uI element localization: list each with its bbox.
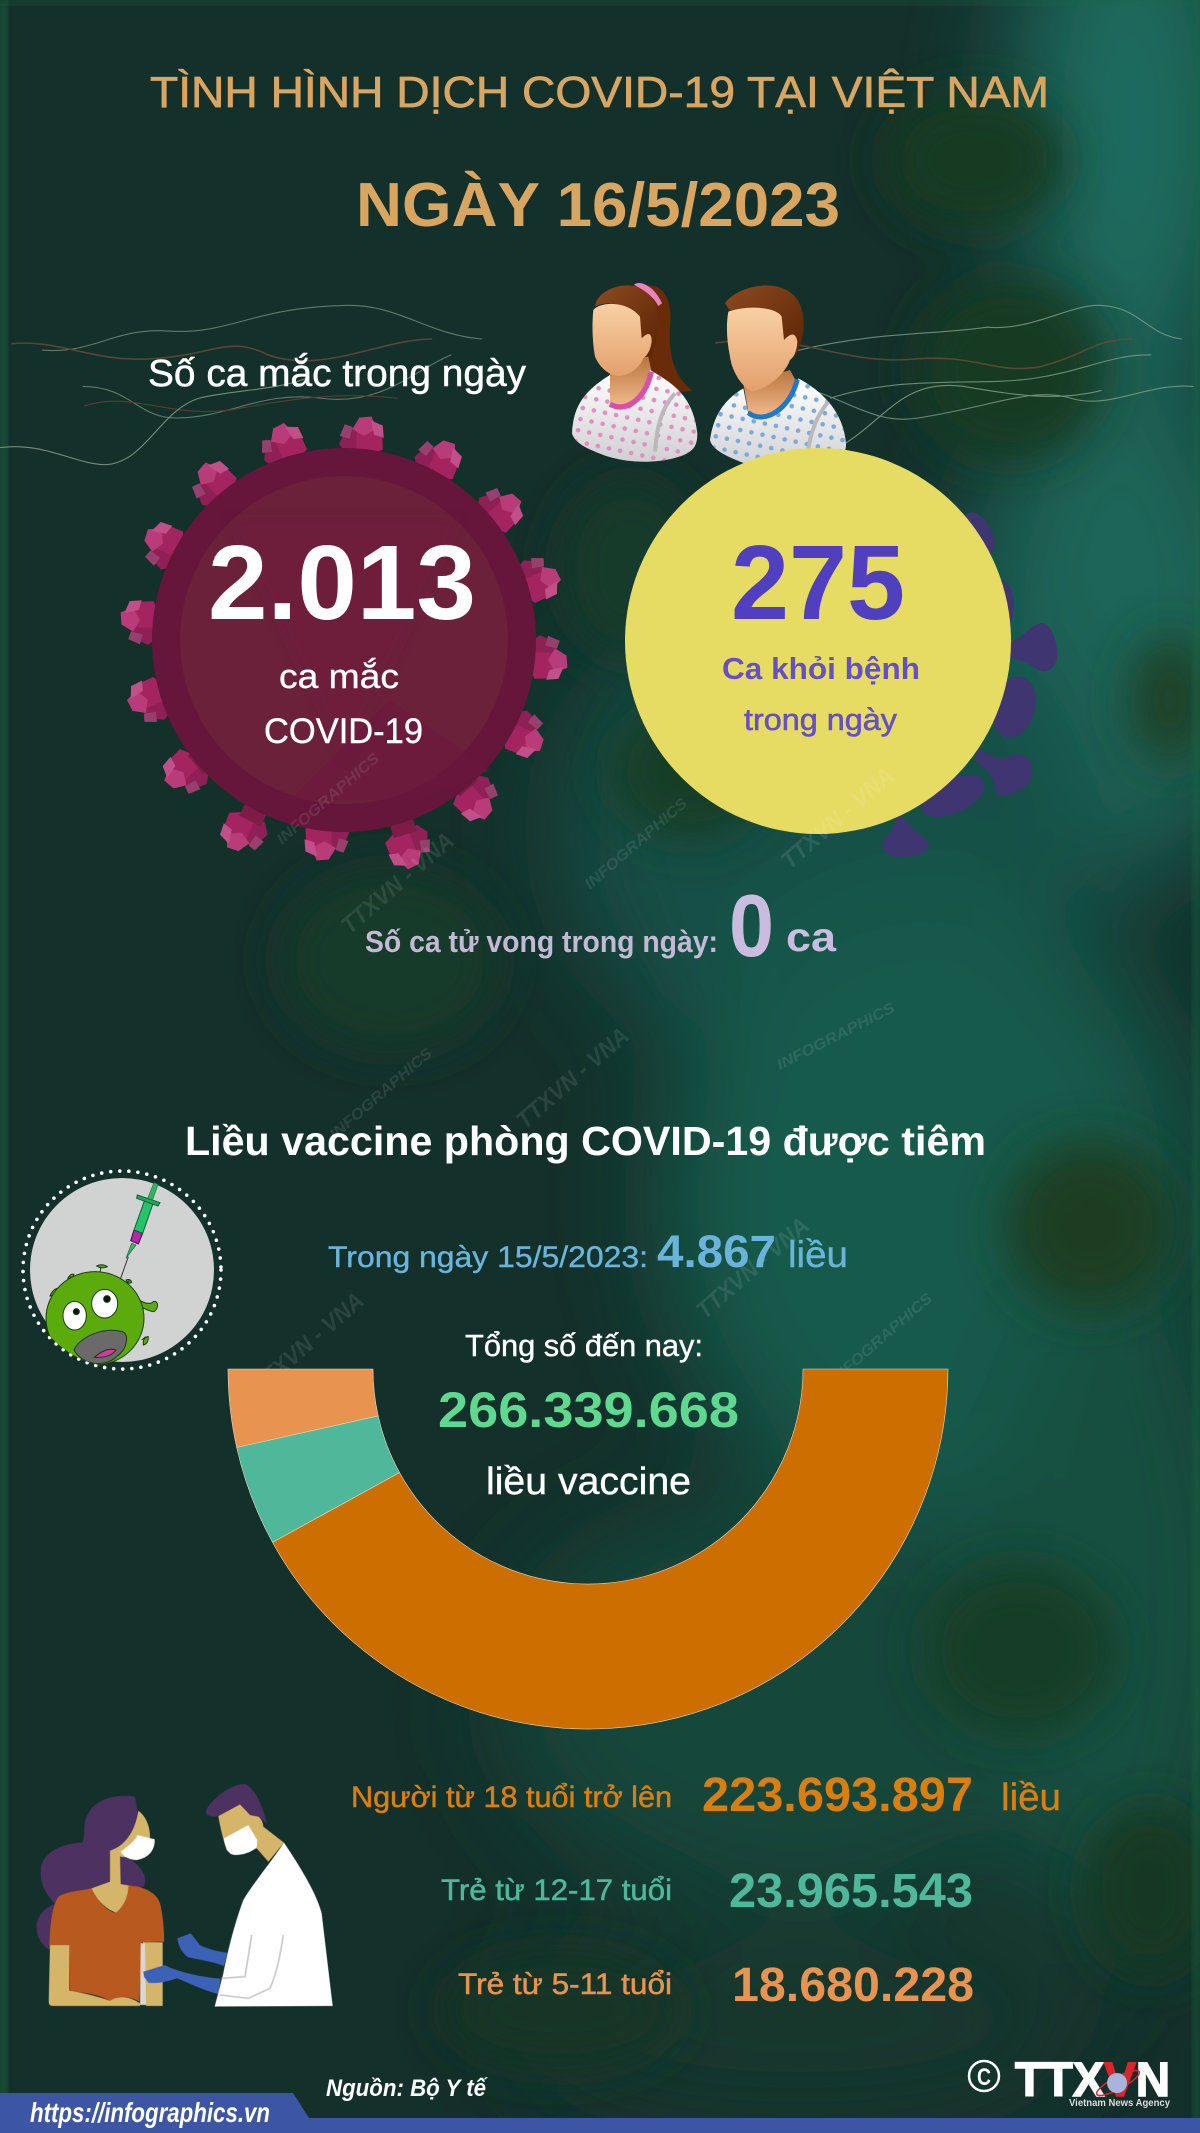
heading: cases today: Số ca mắc trong ngày <box>148 352 526 395</box>
label: recovered: trong ngày <box>744 702 898 737</box>
illustration: vaccination <box>36 1784 333 2007</box>
total doses <box>438 1328 739 1503</box>
label: new cases: ca mắc <box>279 658 399 696</box>
legend row: 5-11: 18.680.228 <box>732 1959 974 2012</box>
deaths line: ca <box>786 914 837 960</box>
virus: purple behind recovered circle <box>882 507 1057 857</box>
virus: red case count <box>118 414 570 874</box>
label: recovered <box>722 651 920 737</box>
label: recovered: Ca khỏi bệnh <box>722 651 920 686</box>
total doses: Tổng số đến nay: <box>465 1328 703 1363</box>
deaths line: 0 <box>729 876 774 975</box>
panel: recovered yellow circle <box>625 448 1011 834</box>
heading: vaccine doses: Liều vaccine phòng COVID-19 được tiêm <box>185 1118 986 1164</box>
semi-donut chart <box>228 1369 948 1729</box>
doctor <box>143 1784 333 2007</box>
today's doses <box>328 1226 848 1277</box>
legend row: adults <box>351 1769 1061 1822</box>
watermarks: TTXVN - VNA <box>246 1287 370 1400</box>
segment: 12-17 <box>237 1416 400 1542</box>
watermarks: TTXVN - VNA <box>776 762 900 875</box>
deaths line: Số ca tử vong trong ngày: <box>365 924 718 959</box>
segment: 18+ <box>272 1369 948 1729</box>
virus character <box>46 1265 158 1365</box>
deaths line <box>365 876 837 975</box>
legend row: 12-17: 23.965.543 <box>729 1865 973 1918</box>
logo: TTXVN: TTXVN <box>1015 2054 1170 2107</box>
legend row: adults: liều <box>1001 1777 1061 1819</box>
decorative waves left <box>0 305 482 465</box>
logo: TTXVN: Vietnam News Agency <box>1069 2097 1170 2109</box>
decorative waves right <box>715 305 1193 446</box>
label: new cases: COVID-19 <box>264 712 423 751</box>
watermarks: INFOGRAPHICS <box>581 795 691 893</box>
label: new cases <box>264 658 423 751</box>
icon: male patient <box>710 286 846 471</box>
spikes <box>118 414 570 874</box>
today's doses: liều <box>788 1234 848 1275</box>
logo: TTXVN: C <box>977 2064 991 2091</box>
watermarks: TTXVN - VNA <box>691 1212 815 1325</box>
segment: 5-11 <box>228 1369 378 1448</box>
watermarks <box>246 750 936 1400</box>
watermarks: INFOGRAPHICS <box>273 750 383 848</box>
legend row: 12-17 <box>441 1865 973 1918</box>
legend row: adults: Người từ 18 tuổi trở lên <box>351 1781 672 1814</box>
subtitle date: NGÀY 16/5/2023 <box>356 171 840 240</box>
watermarks: INFOGRAPHICS <box>774 999 898 1074</box>
patient <box>36 1796 164 2006</box>
icon: female patient <box>572 283 697 462</box>
url: https://infographics.vn <box>30 2097 270 2128</box>
legend row: 5-11 <box>458 1959 974 2012</box>
number: recovered: 275 <box>731 524 905 642</box>
number: new cases: 2.013 <box>208 524 476 642</box>
watermarks: TTXVN - VNA <box>336 827 460 940</box>
legend row: 12-17: Trẻ từ 12-17 tuổi <box>441 1874 672 1907</box>
syringe <box>121 1183 160 1278</box>
icon: virus and syringe <box>23 1171 221 1369</box>
watermarks: TTXVN - VNA <box>511 1022 635 1135</box>
total doses: liều vaccine <box>486 1461 691 1503</box>
watermarks: INFOGRAPHICS <box>826 1290 936 1388</box>
watermarks: INFOGRAPHICS <box>326 1045 436 1143</box>
total doses: 266.339.668 <box>438 1382 739 1438</box>
today's doses: Trong ngày 15/5/2023: <box>328 1241 648 1274</box>
legend row: 5-11: Trẻ từ 5-11 tuổi <box>458 1968 672 2001</box>
source: Nguồn: Bộ Y tế <box>326 2075 488 2102</box>
legend row: adults: 223.693.897 <box>702 1769 973 1822</box>
footer bar <box>0 2093 1200 2133</box>
title: TÌNH HÌNH DỊCH COVID-19 TẠI VIỆT NAM <box>150 68 1049 117</box>
today's doses: 4.867 <box>657 1226 776 1277</box>
